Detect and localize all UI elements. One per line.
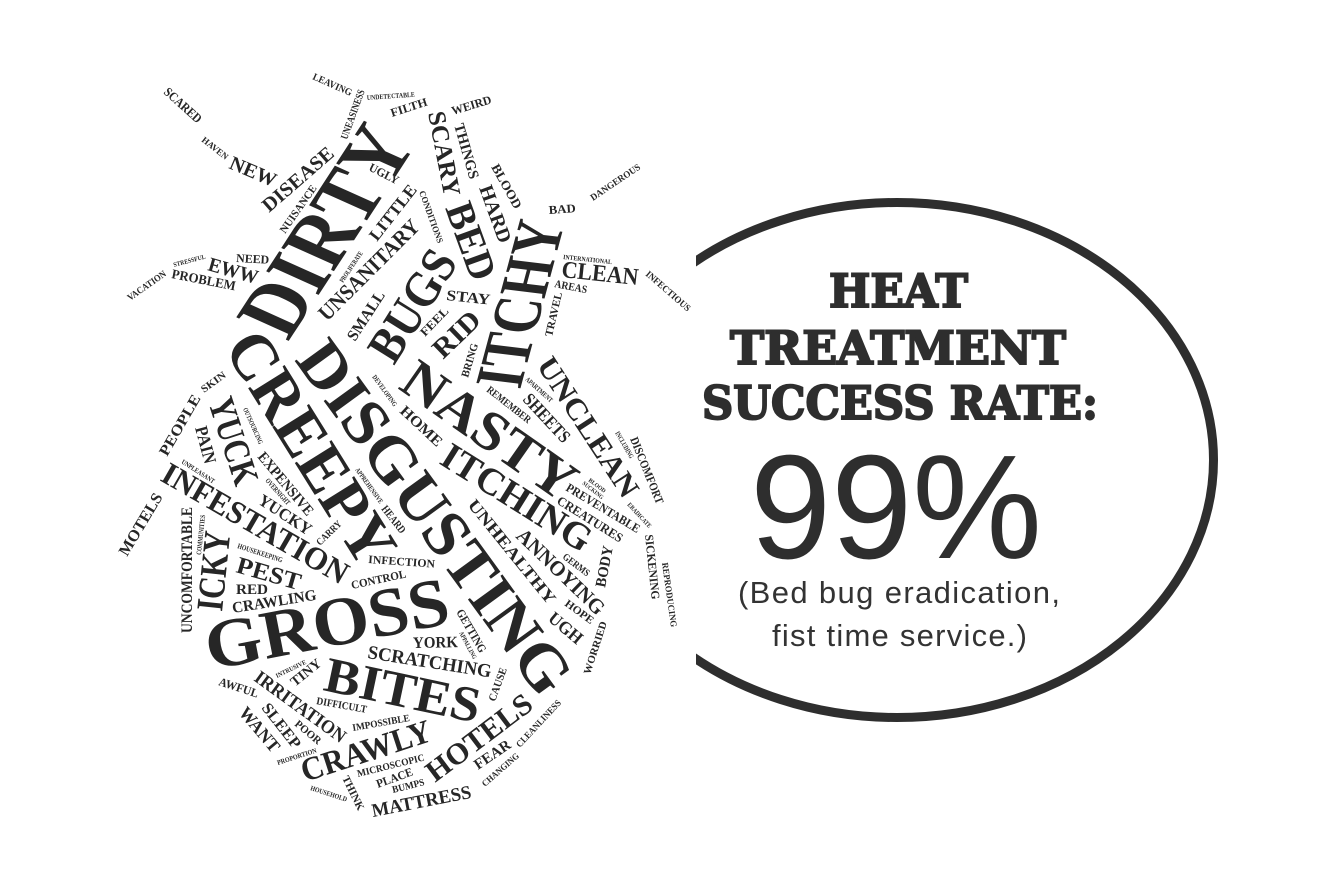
- small words, lower section: [217, 598, 610, 822]
- word: HOTELS: HOTELS: [419, 687, 539, 789]
- small words, upper section: DANGEROUS: [589, 163, 643, 203]
- small words, upper section: INTERNATIONAL: [563, 254, 613, 266]
- word: ICKY: ICKY: [189, 529, 239, 613]
- small words, middle section: PEST: [233, 553, 304, 596]
- small words, middle section: UNCOMFORTABLE: [179, 507, 196, 633]
- word: NASTY: NASTY: [390, 348, 589, 513]
- small words, upper section: BRING: [459, 341, 481, 379]
- small words, upper section: SCARED: [161, 84, 205, 126]
- small words, lower section: THINK: [339, 774, 366, 813]
- small words, middle section: CONTROL: [350, 568, 408, 592]
- word: INFESTATION: INFESTATION: [156, 455, 355, 591]
- small words, lower section: WORRIED: [582, 620, 610, 676]
- small words, middle section: UNHEALTHY: [464, 496, 560, 608]
- small words, middle section: GERMS: [560, 552, 592, 579]
- small words, lower section: PLACE: [374, 765, 415, 791]
- word: DIRTY: DIRTY: [218, 112, 435, 350]
- word: DISGUSTING: DISGUSTING: [282, 326, 587, 709]
- small words, lower section: AWFUL: [217, 675, 260, 701]
- word: BITES: BITES: [320, 646, 486, 734]
- heading: heat treatment success rate: TREATMENT: [730, 321, 1066, 375]
- small words, lower section: HOPE: [562, 598, 596, 627]
- word: GROSS: GROSS: [198, 563, 455, 685]
- small words, middle section: PEOPLE: [157, 392, 204, 459]
- small words, middle section: APPREHENSIVE: [353, 466, 385, 505]
- small words, upper section: NEED: [236, 251, 270, 267]
- word: CRAWLY: CRAWLY: [296, 714, 436, 790]
- small words, lower section: CLEANLINESS: [515, 699, 564, 750]
- panel: success rate oval: [580, 202, 1214, 718]
- small words, middle section: DISCOMFORT: [627, 435, 667, 506]
- small words, lower section: BUMPS: [391, 777, 426, 796]
- caption line 1: (Bed bug eradication,: [738, 575, 1060, 610]
- small words, lower section: YORK: [413, 634, 459, 652]
- small words, lower section: CAUSE: [487, 666, 510, 703]
- small words, upper section: CLEAN: [560, 257, 640, 291]
- small words, upper section: UNEASINESS: [339, 88, 368, 141]
- small words, upper section: [126, 72, 692, 379]
- small words, middle section: MOTELS: [116, 490, 167, 559]
- word: SCARY: SCARY: [422, 109, 465, 199]
- small words, middle section: ERADICATE: [626, 502, 652, 530]
- word: CREEPY: CREEPY: [210, 317, 411, 578]
- small words, upper section: INFECTIOUS: [643, 270, 692, 314]
- small words, middle section: APARTMENT: [524, 376, 554, 404]
- small words, upper section: CONDITIONS: [417, 189, 445, 244]
- word: YUCK: YUCK: [199, 392, 266, 491]
- small words, middle section: INCLUDING: [613, 430, 635, 460]
- small words, upper section: PROLIFERATE: [338, 250, 365, 284]
- small words, lower section: MATTRESS: [370, 782, 473, 822]
- small words, middle section: YUCKY: [255, 490, 315, 539]
- small words, middle section: BLOOD: [587, 478, 607, 495]
- small words, lower section: UGH: [544, 608, 587, 648]
- small words, middle section: SICKENING: [642, 534, 663, 600]
- small words, upper section: BLOOD: [488, 161, 525, 211]
- small words, upper section: EWW: [206, 254, 261, 289]
- heading: heat treatment success rate: HEAT: [829, 264, 968, 318]
- small words, upper section: UGLY: [367, 160, 402, 187]
- small words, lower section: FEAR: [471, 737, 514, 773]
- small words, upper section: HAVEN: [200, 135, 231, 162]
- small words, lower section: POOR: [292, 718, 324, 748]
- small words, upper section: UNSANITARY: [313, 214, 425, 326]
- small words, middle section: CREATURES: [554, 493, 626, 545]
- word: BED: BED: [437, 196, 506, 286]
- word: RID: RID: [426, 305, 487, 365]
- small words, middle section: UNPLEASANT: [180, 458, 216, 486]
- small words, middle section: HEARD: [379, 503, 408, 536]
- small words, lower section: DIFFICULT: [315, 696, 368, 716]
- small words, upper section: LITTLE: [365, 181, 421, 244]
- small words, upper section: HARD: [474, 182, 515, 246]
- small words, upper section: FEEL: [417, 304, 451, 339]
- bed bug shaped word cloud: [116, 72, 692, 822]
- small words, middle section: INFECTION: [368, 554, 436, 571]
- small words, middle section: [116, 370, 679, 633]
- small words, upper section: DISEASE: [258, 142, 339, 217]
- small words, middle section: EXPENSIVE: [254, 449, 316, 519]
- small words, middle section: BODY: [593, 544, 617, 589]
- small words, middle section: REMEMBER: [484, 385, 533, 426]
- word: ITCHY: ITCHY: [460, 216, 580, 392]
- small words, middle section: REPRODUCING: [660, 562, 679, 628]
- small words, upper section: NEW: [226, 152, 280, 192]
- small words, middle section: PAIN: [191, 424, 220, 466]
- small words, middle section: DEVELOPING: [370, 373, 399, 408]
- small words, lower section: PROPORTION: [276, 747, 318, 767]
- small words, upper section: VACATION: [126, 269, 169, 303]
- small words, upper section: AREAS: [553, 278, 588, 296]
- small words, lower section: IRRITATION: [250, 667, 350, 748]
- small words, lower section: GETTING: [453, 606, 490, 655]
- word: UNCLEAN: UNCLEAN: [530, 351, 646, 504]
- heading: heat treatment success rate: [702, 264, 1098, 430]
- word: ITCHING: ITCHING: [433, 435, 600, 561]
- small words, lower section: INTRUSIVE: [275, 659, 308, 680]
- small words, lower section: SCRATCHING: [366, 642, 493, 683]
- small words, upper section: BAD: [548, 201, 576, 217]
- oval outline, clipped on the left: [696, 198, 1218, 722]
- small words, upper section: PROBLEM: [170, 266, 237, 293]
- small words, upper section: STAY: [446, 288, 491, 309]
- small words, upper section: STRESSFUL: [173, 253, 207, 269]
- small words, upper section: TRAVEL: [543, 291, 565, 338]
- small words, upper section: UNDETECTABLE: [367, 91, 415, 102]
- small words, lower section: TINY: [288, 656, 325, 690]
- small words, middle section: CRAWLING: [231, 587, 318, 617]
- small words, lower section: SLEEP: [258, 700, 304, 752]
- small words, lower section: CHANGING: [480, 751, 521, 789]
- small words, middle section: OUTSOURCING: [241, 407, 265, 446]
- heading: heat treatment success rate: SUCCESS RATE:: [702, 376, 1098, 430]
- small words, upper section: FILTH: [389, 95, 430, 120]
- small words, lower section: MICROSCOPIC: [356, 753, 426, 780]
- small words, middle section: OVERNIGHT: [264, 476, 292, 507]
- small words, middle section: SKIN: [199, 370, 229, 395]
- small words, upper section: NUISANCE: [278, 183, 320, 236]
- small words, lower section: HOUSEHOLD: [309, 784, 348, 804]
- small words, middle section: COMMUNITIES: [195, 515, 207, 555]
- word: BUGS: BUGS: [356, 239, 468, 372]
- small words, upper section: SMALL: [344, 288, 389, 344]
- small words, middle section: HOUSEKEEPING: [236, 541, 284, 564]
- small words, middle section: PREVENTABLE: [563, 481, 643, 536]
- small words, lower section: WANT: [235, 703, 284, 756]
- small words, middle section: HOME: [396, 403, 445, 450]
- small words, lower section: IMPOSSIBLE: [352, 713, 411, 734]
- small words, upper section: WEIRD: [450, 92, 493, 118]
- small words, middle section: ANNOYING: [512, 523, 610, 620]
- small words, middle section: SUCKING: [581, 481, 604, 501]
- small words, upper section: LEAVING: [311, 72, 354, 99]
- small words, middle section: CARRY: [314, 518, 345, 548]
- caption line 2: fist time service.): [772, 618, 1027, 653]
- statistic: 99%: 99%: [750, 425, 1042, 590]
- small words, middle section: SHEETS: [519, 389, 575, 447]
- small words, lower section: APPALLING: [457, 631, 477, 660]
- small words, middle section: RED: [236, 582, 268, 598]
- small words, upper section: THINGS: [450, 122, 481, 181]
